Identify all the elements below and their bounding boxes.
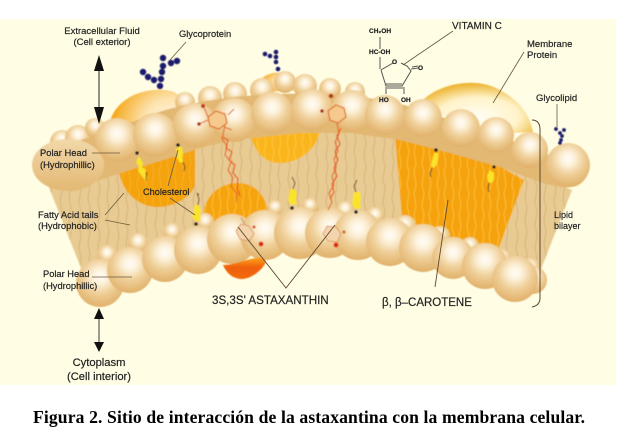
lower leaflet lipid heads: [76, 198, 547, 307]
vitamin C structure: HC-OH: [369, 49, 391, 56]
label: lipid bilayer: Lipid: [554, 210, 573, 220]
label: cytoplasm: Cytoplasm: [73, 357, 125, 369]
vitamin C structure: OH: [401, 97, 411, 104]
label: polar head lower: (Hydrophillic): [43, 281, 97, 291]
label: membrane protein: Protein: [527, 50, 557, 61]
astaxanthin pointer lines: [238, 225, 335, 288]
upper leaflet lipid heads: [32, 89, 590, 191]
protein dome: membrane protein: [423, 83, 533, 135]
red-orange protein base: [223, 258, 266, 279]
label leader lines: [92, 31, 557, 277]
back row of lipid heads: [50, 71, 365, 154]
label: cytoplasm: (Cell interior): [67, 371, 131, 383]
astaxanthin molecule: left: [197, 104, 263, 246]
label: lipid bilayer: bilayer: [554, 221, 581, 231]
lipid bilayer bracket: [532, 120, 540, 307]
upper leaflet shadow band: [35, 94, 586, 190]
vitamin C structure: O: [392, 59, 397, 66]
glycolipid chain: [554, 127, 566, 145]
orange protein: left channel: [118, 145, 195, 207]
vitamin C structure: [369, 28, 423, 104]
panel: cream background: [0, 19, 616, 385]
label: polar head upper: Polar Head: [40, 147, 87, 158]
label: fatty acid tails: (Hydrophobic): [38, 220, 97, 231]
label: glycolipid: Glycolipid: [536, 93, 577, 104]
lipid tail region: [48, 130, 572, 292]
caption: Figura 2. Sitio de interacción de la astaxantina con la membrana celular.: [33, 407, 585, 427]
glycoprotein chains: [140, 50, 280, 89]
label: vitamin C: VITAMIN C: [452, 21, 502, 32]
vitamin C structure: O: [418, 65, 423, 72]
label: membrane protein: Membrane: [527, 39, 572, 50]
arrow: cytoplasm: [94, 308, 104, 352]
carotene pointer line: [435, 200, 448, 287]
label: fatty acid tails: Fatty Acid tails: [38, 209, 98, 220]
orange protein: centre lower: [203, 183, 268, 232]
label: polar head lower: Polar Head: [43, 269, 90, 279]
label: cholesterol: Cholesterol: [143, 187, 189, 197]
label: carotene: β, β–CAROTENE: [382, 297, 472, 309]
astaxanthin molecule: right: [320, 94, 346, 247]
membrane illustration: [32, 50, 590, 307]
orange protein: centre upper: [250, 130, 320, 163]
protein dome: left: [109, 90, 191, 170]
label: polar head upper: (Hydrophillic): [40, 159, 95, 170]
label: extracellular fluid: (Cell exterior): [73, 37, 131, 48]
label: extracellular fluid: Extracellular Fluid: [64, 26, 140, 37]
label: glycoprotein: Glycoprotein: [179, 29, 231, 39]
vitamin C structure: CH₂OH: [369, 28, 391, 35]
arrow: extracellular: [94, 55, 104, 124]
cholesterol molecules: [135, 143, 496, 226]
protein dome: back centre: [258, 72, 300, 92]
vitamin C structure: HO: [379, 97, 389, 104]
label: astaxanthin: 3S,3S' ASTAXANTHIN: [212, 294, 329, 307]
orange protein: carotene channel: [395, 135, 524, 250]
